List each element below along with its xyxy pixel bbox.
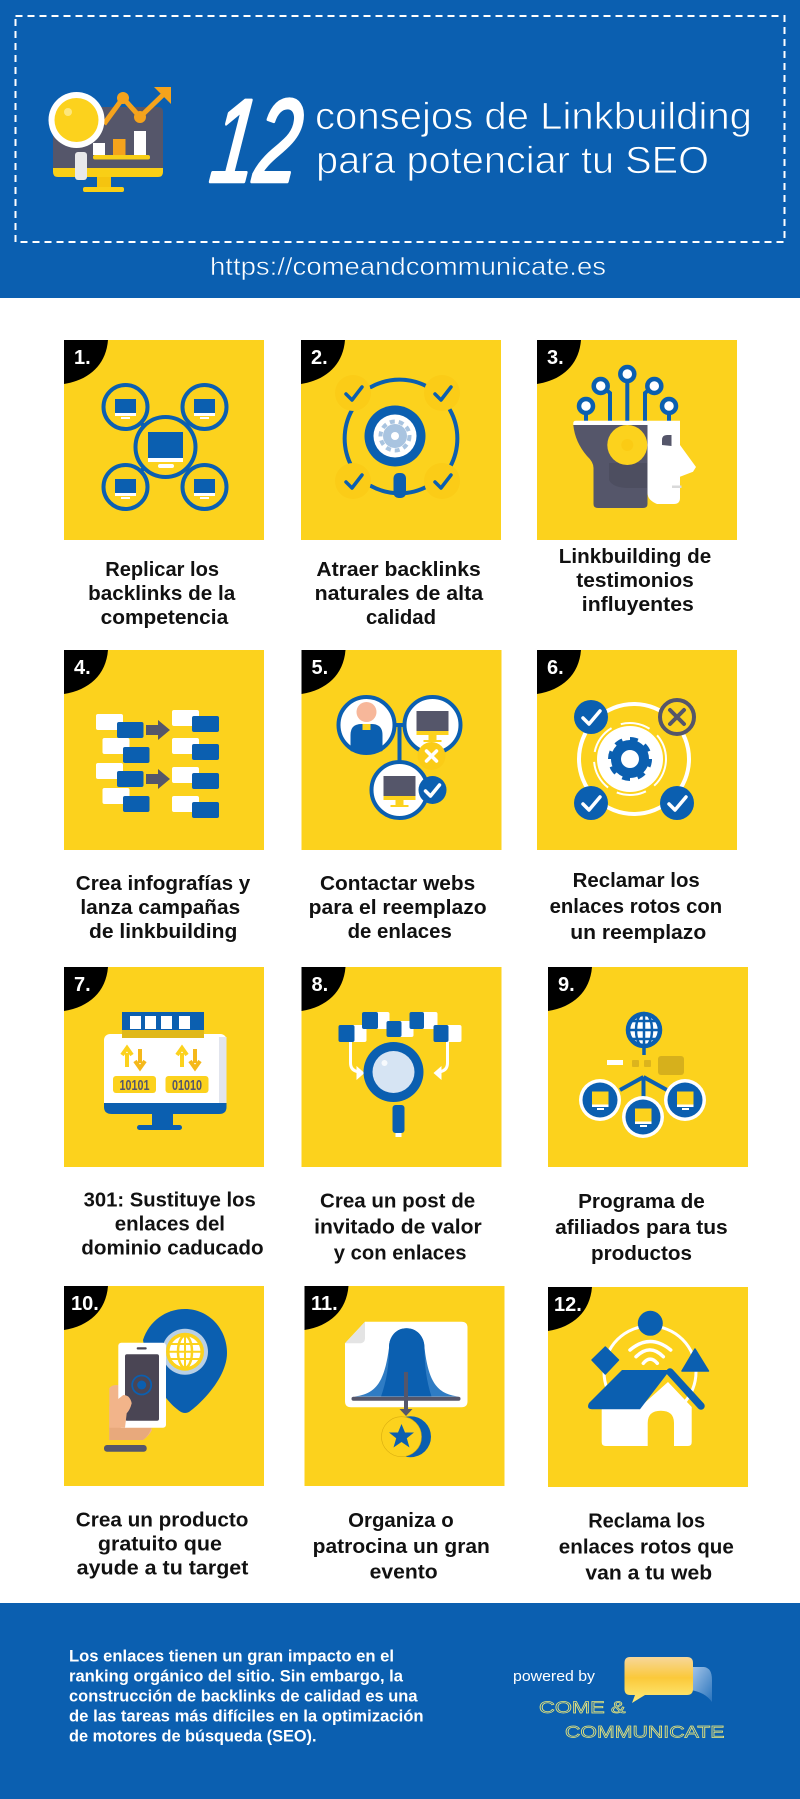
icon: monitor with chart and magnifier — [48, 87, 171, 192]
caption 11: Organiza o — [348, 1509, 454, 1532]
caption 6: un reemplazo — [570, 921, 706, 944]
card 9: 9. — [558, 974, 575, 996]
caption 12 — [559, 1510, 734, 1585]
caption 11: evento — [370, 1560, 438, 1583]
card 11: 11. — [311, 1293, 338, 1315]
caption 10: Crea un producto — [76, 1509, 248, 1532]
caption 7 — [81, 1189, 264, 1260]
card 12: 12. — [554, 1294, 582, 1316]
caption 1: backlinks de la — [88, 582, 236, 605]
icon: magnifier with tags — [338, 1012, 462, 1137]
card 9 — [548, 967, 748, 1167]
caption 6 — [550, 869, 722, 944]
caption 7: enlaces del — [115, 1213, 225, 1236]
footer text: Los enlaces tienen un gran impacto en el — [69, 1647, 394, 1666]
card 6 — [537, 650, 737, 850]
card 1 — [64, 340, 264, 540]
caption 7: dominio caducado — [81, 1237, 264, 1260]
icon: monitor with memory and binary: 01010 — [172, 1077, 202, 1094]
title — [315, 96, 752, 182]
dashed frame — [16, 16, 784, 242]
caption 4: lanza campañas — [80, 896, 240, 919]
caption 11 — [313, 1509, 490, 1583]
card 3 — [537, 340, 737, 540]
card 5 — [302, 650, 502, 850]
caption 1 — [88, 558, 236, 629]
caption 5: de enlaces — [348, 920, 452, 943]
caption 3: Linkbuilding de — [559, 545, 711, 568]
icon: house with wifi — [588, 1311, 708, 1446]
card 5: 5. — [312, 657, 328, 679]
caption 4 — [76, 872, 251, 943]
caption 2: Atraer backlinks — [316, 558, 481, 581]
title: consejos de Linkbuilding — [315, 96, 752, 138]
footer text — [69, 1647, 424, 1746]
card 8: 8. — [312, 974, 328, 996]
icon: contact person and webs — [338, 697, 460, 818]
card 11 — [304, 1286, 504, 1486]
icon: gear cycle with checks — [574, 700, 694, 820]
caption 6: enlaces rotos con — [550, 895, 722, 918]
card 4 — [64, 650, 264, 850]
powered by: powered by — [513, 1668, 596, 1685]
caption 5 — [309, 872, 487, 943]
caption 10: gratuito que — [98, 1533, 222, 1556]
icon: monitor with memory and binary: 10101 — [120, 1077, 150, 1094]
caption 12: enlaces rotos que — [559, 1536, 734, 1559]
caption 9 — [555, 1190, 728, 1265]
icon: globe and affiliate network — [579, 1013, 706, 1138]
card 12 — [548, 1287, 748, 1487]
card 1: 1. — [74, 347, 91, 369]
footer — [0, 1603, 800, 1799]
card 8 — [302, 967, 502, 1167]
caption 1: Replicar los — [105, 558, 219, 581]
caption 12: Reclama los — [588, 1510, 705, 1533]
card 7: 7. — [74, 974, 91, 996]
icon: head with circuit — [573, 367, 696, 508]
title: para potenciar tu SEO — [316, 140, 709, 182]
caption 4: de linkbuilding — [89, 920, 237, 943]
footer text: de motores de búsqueda (SEO). — [69, 1727, 316, 1746]
caption 6: Reclamar los — [573, 869, 700, 892]
caption 5: Contactar webs — [320, 872, 475, 895]
card 10 — [64, 1286, 264, 1486]
caption 5: para el reemplazo — [309, 896, 487, 919]
caption 8 — [314, 1190, 482, 1265]
caption 7: 301: Sustituye los — [84, 1189, 256, 1212]
caption 2: calidad — [366, 606, 436, 629]
icon: phone in hand with location pin — [104, 1309, 227, 1452]
card 10: 10. — [71, 1293, 99, 1315]
caption 1: competencia — [101, 606, 229, 629]
big number 12: 12 — [205, 76, 309, 207]
logo wordmark — [539, 1698, 724, 1742]
icon: monitor with memory and binary — [104, 1012, 226, 1130]
caption 10 — [76, 1509, 249, 1580]
caption 10: ayude a tu target — [77, 1557, 249, 1580]
caption 3: testimonios — [576, 569, 694, 592]
card 6: 6. — [547, 657, 564, 679]
logo wordmark: COME & — [539, 1698, 626, 1717]
footer text: construcción de backlinks de calidad es una — [69, 1687, 418, 1706]
caption 12: van a tu web — [585, 1562, 712, 1585]
header banner — [0, 0, 800, 298]
card 2 — [301, 340, 501, 540]
card 2: 2. — [311, 347, 328, 369]
card 4: 4. — [74, 657, 91, 679]
caption 3: influyentes — [582, 593, 694, 616]
footer text: ranking orgánico del sitio. Sin embargo, la — [69, 1667, 404, 1686]
icon: document with bell curve and coin — [345, 1322, 468, 1457]
caption 4: Crea infografías y — [76, 872, 251, 895]
website url: https://comeandcommunicate.es — [210, 253, 606, 281]
caption 9: productos — [591, 1242, 692, 1265]
caption 9: Programa de — [578, 1190, 705, 1213]
caption 9: afiliados para tus — [555, 1216, 728, 1239]
icon: infographic blocks and arrows — [96, 710, 219, 818]
footer text: de las tareas más difíciles en la optimización — [69, 1707, 424, 1726]
caption 3 — [559, 545, 711, 616]
caption 2 — [315, 558, 484, 629]
caption 8: Crea un post de — [320, 1190, 475, 1213]
logo wordmark: COMMUNICATE — [565, 1722, 724, 1742]
card 7 — [64, 967, 264, 1167]
caption 8: y con enlaces — [334, 1242, 466, 1265]
icon: gear in ring with checks — [335, 375, 460, 499]
logo: speech bubbles — [624, 1657, 712, 1703]
caption 11: patrocina un gran — [313, 1535, 490, 1558]
icon: network of monitors — [104, 385, 226, 509]
card 3: 3. — [547, 347, 564, 369]
caption 2: naturales de alta — [315, 582, 484, 605]
caption 8: invitado de valor — [314, 1216, 482, 1239]
